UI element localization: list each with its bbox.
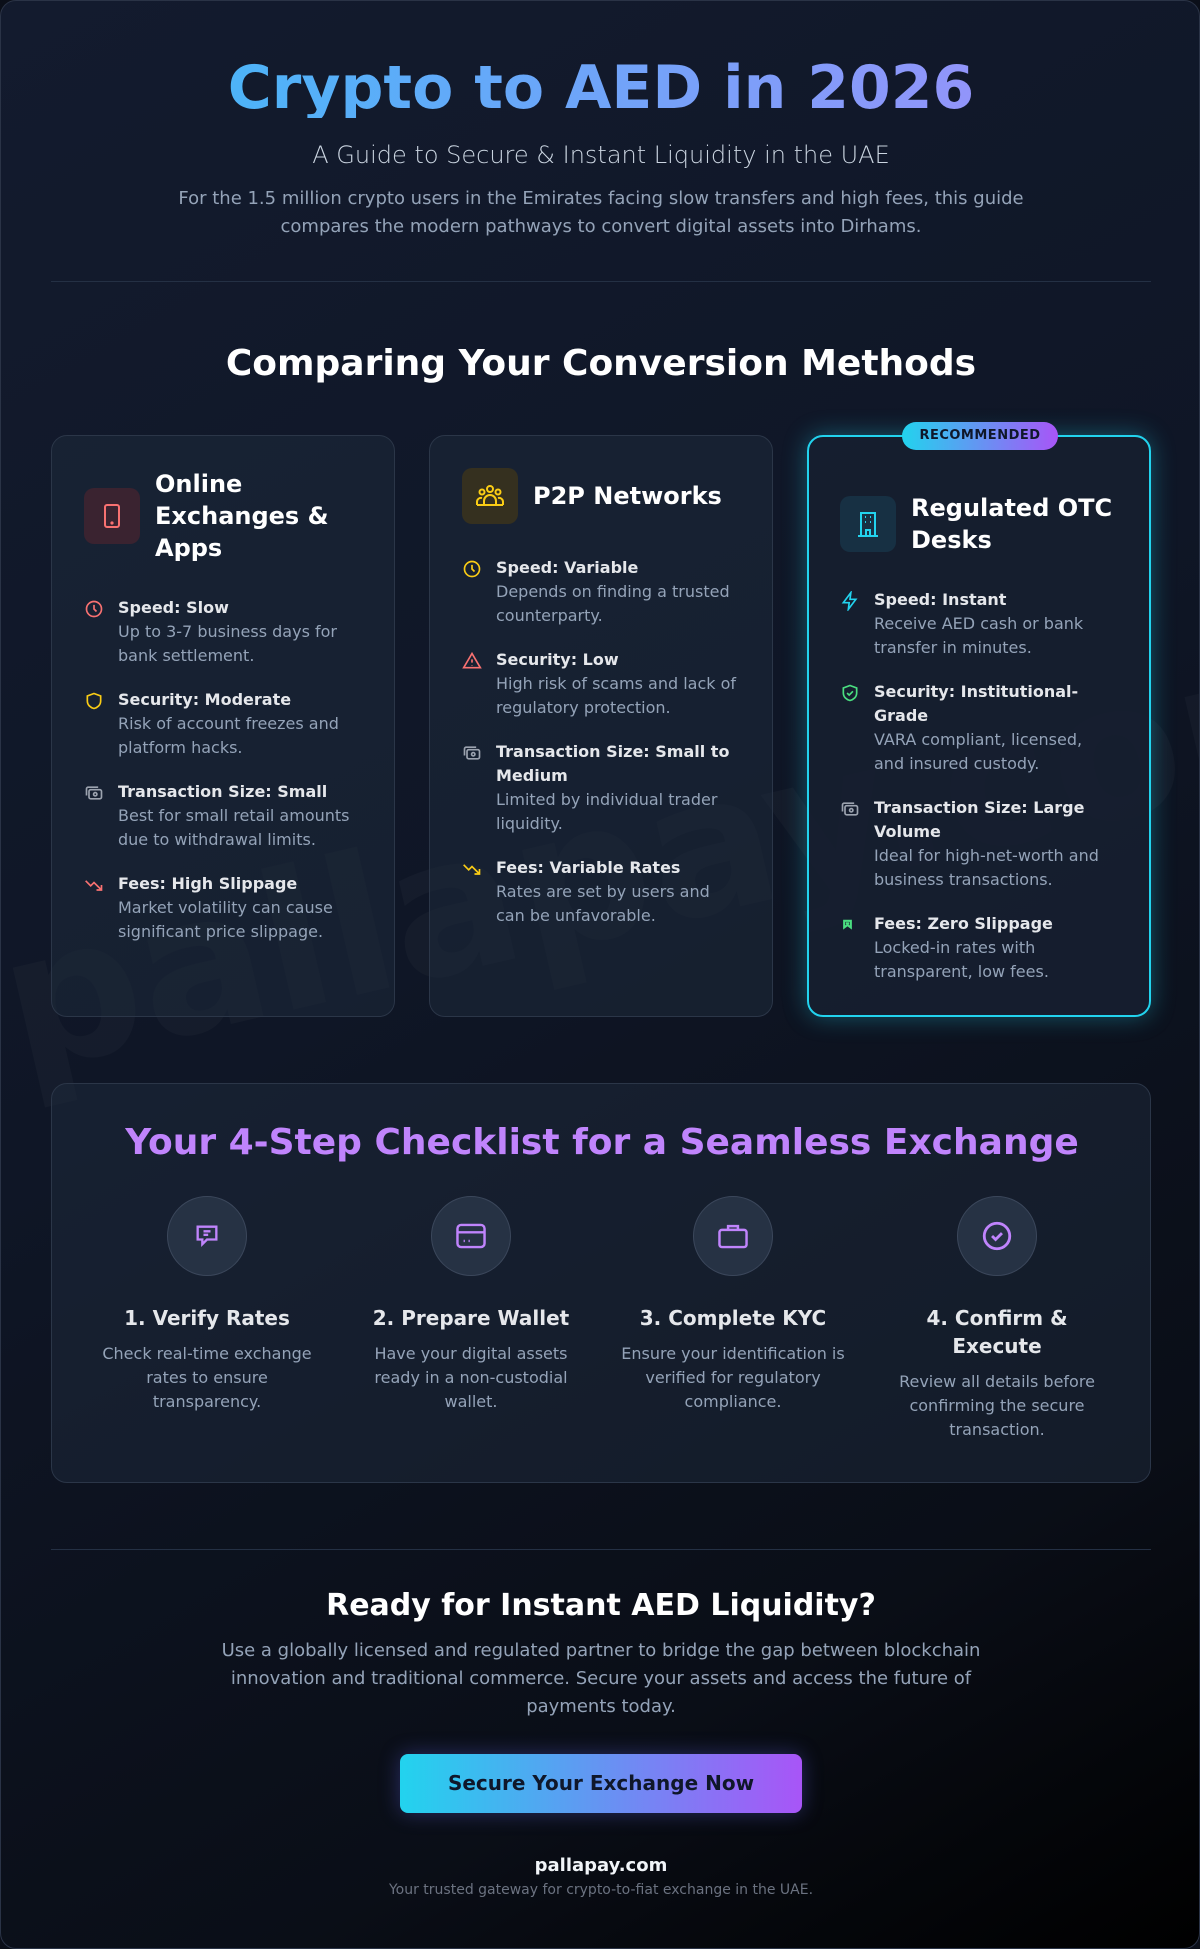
card items: Security: Institutional- <box>874 682 1078 701</box>
card items: Speed: Instant <box>874 590 1006 609</box>
card header: P2P Networks <box>533 482 722 510</box>
step 4: Review all details before confirming the secure transaction. <box>899 1372 1095 1439</box>
card items: Receive AED cash or bank transfer in minutes. <box>874 614 1083 657</box>
card items: Depends on finding a trusted counterparty. <box>496 582 730 625</box>
cta button <box>400 1754 802 1813</box>
card items: Ideal for high-net-worth and business transactions. <box>874 846 1099 889</box>
step 2 <box>373 1196 569 1411</box>
footer tagline: Your trusted gateway for crypto-to-fiat exchange in the UAE. <box>389 1882 813 1898</box>
card items <box>85 598 350 941</box>
card header: Desks <box>911 526 992 554</box>
intro text: For the 1.5 million crypto users in the Emirates facing slow transfers and high fees, this guide compares the modern pathways to convert digital assets into Dirhams. <box>178 188 1024 237</box>
card items: Limited by individual trader liquidity. <box>496 790 717 833</box>
checklist heading: Your 4-Step Checklist for a Seamless Exchange <box>125 1122 1079 1163</box>
step 1: 1. Verify Rates <box>124 1306 290 1330</box>
subtitle: A Guide to Secure & Instant Liquidity in the UAE <box>312 141 890 169</box>
card items <box>462 558 736 925</box>
card items: Fees: Zero Slippage <box>874 914 1053 933</box>
card items: Transaction Size: Large Volume <box>874 798 1084 841</box>
card items: Transaction Size: Small to Medium <box>496 742 729 785</box>
card items: Market volatility can cause significant price slippage. <box>118 898 333 941</box>
card items: Locked-in rates with <box>874 938 1035 957</box>
card items <box>842 590 1099 981</box>
step 4 <box>899 1196 1095 1439</box>
badge: recommended <box>902 422 1058 450</box>
card items: and insured custody. <box>874 754 1039 773</box>
step 2: 2. Prepare Wallet <box>373 1306 569 1330</box>
card items: Best for small retail amounts due to withdrawal limits. <box>118 806 350 849</box>
panel: 4-step checklist <box>51 1083 1151 1483</box>
step 3 <box>621 1196 845 1411</box>
cta heading: Ready for Instant AED Liquidity? <box>326 1588 876 1623</box>
step 1 <box>102 1196 312 1411</box>
card items: Transaction Size: Small <box>118 782 327 801</box>
step 2: Have your digital assets ready in a non-custodial wallet. <box>374 1344 568 1411</box>
step 3: 3. Complete KYC <box>640 1306 826 1330</box>
card header <box>462 468 722 524</box>
card items: Security: Moderate <box>118 690 291 709</box>
card header: Online Exchanges & Apps <box>155 470 328 562</box>
cta button: Secure Your Exchange Now <box>448 1771 754 1795</box>
card items: Rates are set by users and <box>496 882 710 901</box>
card items: High risk of scams and lack of regulatory protection. <box>496 674 736 717</box>
card header <box>840 494 1112 554</box>
panel: online exchanges <box>51 435 395 1017</box>
card items: Fees: High Slippage <box>118 874 297 893</box>
badge: recommended: RECOMMENDED <box>919 428 1041 443</box>
card items: Fees: Variable Rates <box>496 858 680 877</box>
card items: can be unfavorable. <box>496 906 656 925</box>
step 4: 4. Confirm & Execute <box>926 1306 1068 1358</box>
card items: Risk of account freezes and platform hacks. <box>118 714 339 757</box>
panel: p2p networks <box>429 435 773 1017</box>
card items: Up to 3-7 business days for bank settlement. <box>118 622 337 665</box>
card items: Speed: Variable <box>496 558 638 577</box>
card header: Regulated OTC <box>911 494 1112 522</box>
title: Crypto to AED in 2026 <box>228 53 974 123</box>
card items: Security: Low <box>496 650 619 669</box>
card items: VARA compliant, licensed, <box>874 730 1082 749</box>
footer brand: pallapay.com <box>535 1855 667 1876</box>
card items: transparent, low fees. <box>874 962 1049 981</box>
card items: Speed: Slow <box>118 598 229 617</box>
cta text: Use a globally licensed and regulated partner to bridge the gap between blockchain innovation and traditional commerce. Secure your assets and access the future of payments today. <box>222 1640 980 1717</box>
panel: regulated otc desks <box>807 435 1151 1017</box>
section heading: comparing methods: Comparing Your Conversion Methods <box>226 343 976 384</box>
card items: Grade <box>874 706 928 725</box>
step 3: Ensure your identification is verified for regulatory compliance. <box>621 1344 845 1411</box>
step 1: Check real-time exchange rates to ensure transparency. <box>102 1344 312 1411</box>
